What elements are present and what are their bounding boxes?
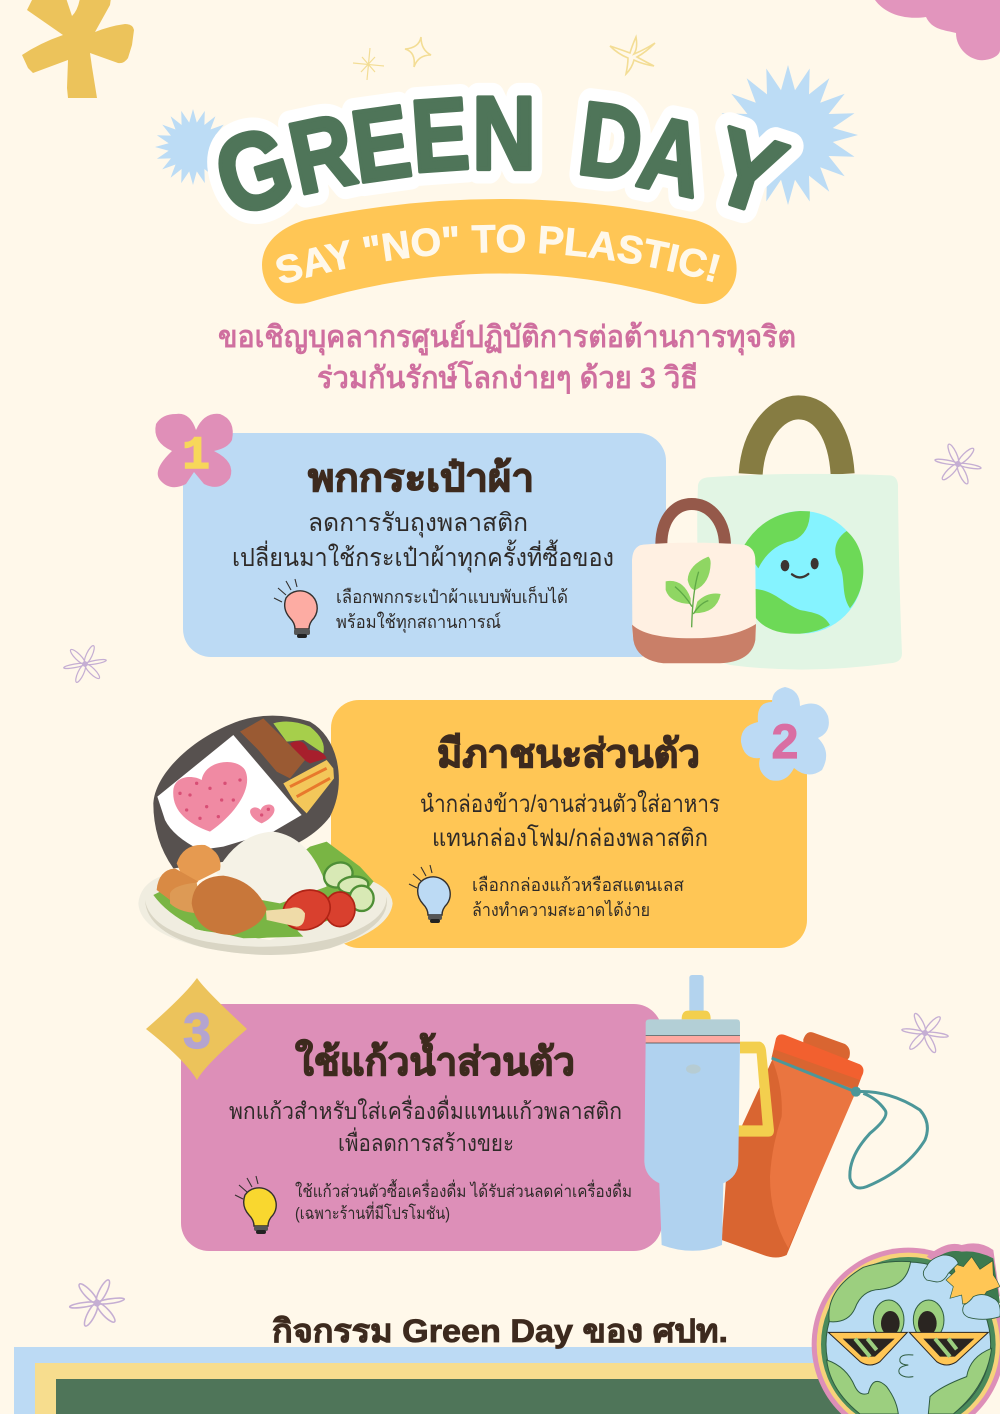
intro text (218, 320, 796, 395)
title: GREEN DAY: A (630, 94, 714, 220)
illustration: bento and plate (138, 716, 393, 955)
plate (138, 877, 393, 955)
title: GREEN DAY: N (472, 76, 536, 192)
illustration: tote bags (632, 407, 902, 670)
decoration: small blue starburst (155, 109, 231, 185)
footer bars (14, 1347, 846, 1414)
body 1 (232, 509, 614, 573)
intro text: ร่วมกันรักษ์โลกง่ายๆ ด้วย 3 วิธี (317, 359, 698, 395)
tomatoes (277, 884, 355, 936)
panel 1: cloth bag (183, 433, 666, 657)
subtitle banner: SAY "NO" TO PLASTIC! (276, 224, 720, 283)
lettuce (153, 842, 378, 940)
tip 3: ใช้แก้วส่วนตัวซื้อเครื่องดื่ม ได้รับส่วนลดค่าเครื่องดื่ม (295, 1179, 632, 1201)
body 2: แทนกล่องโฟม/กล่องพลาสติก (432, 824, 708, 852)
icon: blue bulb (409, 865, 450, 923)
decoration: lilac flowers (61, 441, 984, 1330)
eyes (873, 1300, 944, 1340)
badge 1: 1 (182, 430, 210, 482)
lettuce front (153, 887, 303, 938)
title: GREEN DAY: R (280, 92, 364, 216)
orange bottle (722, 1032, 927, 1257)
tip 3: (เฉพาะร้านที่มีโปรโมชัน) (295, 1201, 450, 1223)
icon: yellow bulb (235, 1176, 276, 1234)
decoration: sparkles (353, 37, 655, 80)
body 2: นำกล่องข้าว/จานส่วนตัวใส่อาหาร (420, 790, 720, 818)
title: GREEN DAY (202, 76, 798, 240)
title: GREEN DAY: E (345, 83, 417, 204)
sun (946, 1257, 1000, 1304)
body 3 (229, 1095, 622, 1156)
cucumbers (320, 858, 374, 911)
tip 2 (472, 875, 684, 920)
badge 1 (155, 414, 233, 487)
title: GREEN DAY: Y (698, 105, 798, 238)
illustration: tumblers (644, 975, 927, 1257)
sunglasses (828, 1332, 988, 1365)
intro text: ขอเชิญบุคลากรศูนย์ปฏิบัติการต่อต้านการทุจริต (218, 320, 796, 356)
rice mound (216, 832, 327, 903)
title: GREEN DAY: G (202, 103, 306, 240)
body 1: เปลี่ยนมาใช้กระเป๋าผ้าทุกครั้งที่ซื้อของ (232, 539, 614, 573)
footer text: กิจกรรม Green Day ของ ศปท. (272, 1313, 728, 1349)
icon: pink bulb (274, 579, 317, 638)
badge 3 (146, 978, 247, 1080)
title: GREEN DAY: G (202, 103, 306, 240)
illustration: earth with sunglasses (812, 1243, 1000, 1414)
tip 1: พร้อมใช้ทุกสถานการณ์ (336, 611, 501, 633)
panel 2: personal lunchbox (331, 700, 807, 948)
tip 2: ล้างทำความสะอาดได้ง่าย (472, 899, 650, 920)
fried chicken (157, 845, 305, 935)
heading 1: พกกระเป๋าผ้า (308, 457, 534, 500)
bento box (153, 716, 339, 868)
panel 3: personal tumbler (181, 1004, 662, 1251)
land masses (827, 1261, 992, 1414)
title: GREEN DAY: E (408, 76, 472, 194)
title: GREEN DAY: D (573, 81, 649, 203)
badge 2: 2 (772, 716, 798, 769)
decoration: large blue starburst (718, 65, 858, 205)
decoration: yellow asterisk (22, 0, 134, 98)
blue tumbler (644, 975, 774, 1251)
title: GREEN DAY: A (630, 94, 714, 220)
badge 3: 3 (183, 1003, 211, 1059)
nose (899, 1355, 913, 1377)
title: GREEN DAY: E (345, 83, 417, 204)
subtitle banner (262, 199, 737, 304)
title: GREEN DAY: N (472, 76, 536, 192)
title: GREEN DAY: R (280, 92, 364, 216)
rice with hearts (157, 735, 302, 850)
badge 2 (741, 687, 829, 781)
heading 2: มีภาชนะส่วนตัว (437, 733, 700, 776)
title: GREEN DAY: E (408, 76, 472, 194)
clouds (923, 1255, 1000, 1319)
body 3: พกแก้วสำหรับใส่เครื่องดื่มแทนแก้วพลาสติก (229, 1095, 622, 1124)
body 1: ลดการรับถุงพลาสติก (308, 509, 528, 538)
body 2 (420, 790, 720, 852)
side dishes (240, 718, 334, 813)
tip 1: เลือกพกกระเป๋าผ้าแบบพับเก็บได้ (336, 585, 568, 607)
title: GREEN DAY: Y (698, 105, 798, 238)
decoration: pink blob top right (875, 0, 1000, 60)
title: GREEN DAY: D (573, 81, 649, 203)
heading 3: ใช้แก้วน้ำส่วนตัว (295, 1033, 575, 1084)
tip 1 (336, 585, 568, 633)
tip 3 (295, 1179, 632, 1223)
tip 2: เลือกกล่องแก้วหรือสแตนเลส (472, 875, 684, 895)
body 3: เพื่อลดการสร้างขยะ (338, 1127, 514, 1156)
